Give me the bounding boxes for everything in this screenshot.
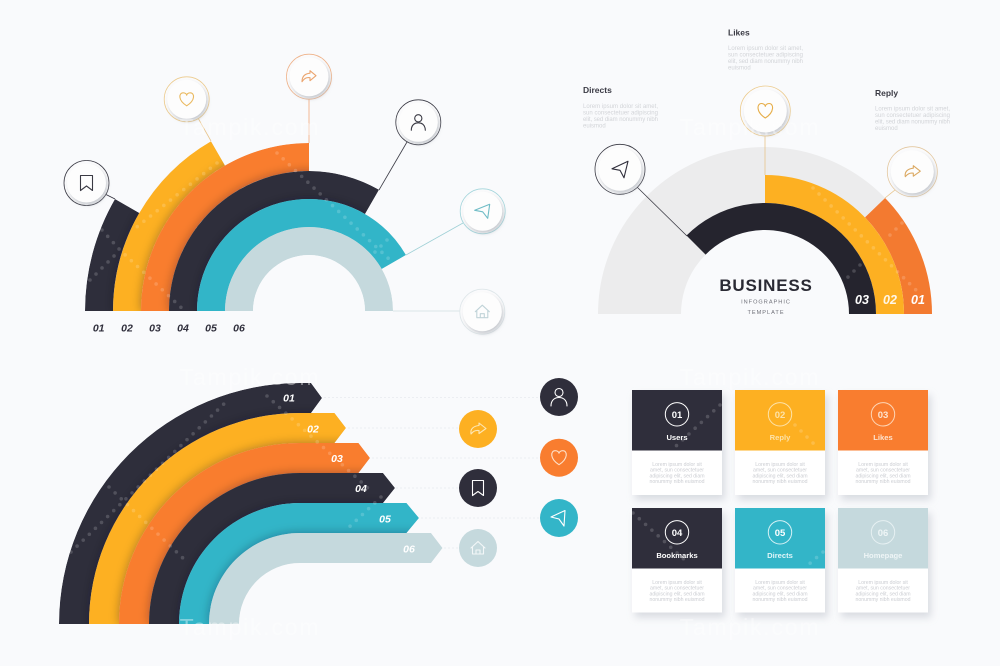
band numbers: 04 — [177, 322, 189, 334]
arrow numbers — [283, 392, 415, 556]
icon: share badge — [286, 54, 332, 99]
watermarks: Tampik.com — [680, 614, 820, 640]
arrow numbers: 05 — [379, 514, 391, 526]
icon: heart badge — [164, 77, 209, 122]
title block: TEMPLATE — [747, 310, 785, 316]
watermarks: Tampik.com — [680, 364, 820, 390]
card: Homepage: Lorem ipsum dolor sit — [858, 580, 908, 586]
card: Homepage: nonummy nibh euismod — [855, 597, 911, 603]
card: Bookmarks: Bookmarks — [656, 551, 698, 560]
text: Reply: elit, sed diam nonummy nibh — [875, 120, 950, 126]
dashed connector lines — [324, 398, 540, 548]
text: Directs: elit, sed diam nonummy nibh — [583, 117, 658, 123]
text: Reply: Lorem ipsum dolor sit amet, — [875, 106, 950, 112]
card: Directs: Lorem ipsum dolor sit — [755, 580, 805, 586]
card: Homepage: amet, sun consectetuer — [856, 586, 910, 592]
card: Reply: adipiscing elit, sed diam — [752, 473, 808, 479]
card: Bookmarks: adipiscing elit, sed diam — [649, 591, 705, 597]
text: Likes: Likes — [728, 28, 750, 38]
connector lines — [105, 99, 463, 311]
text: Reply — [875, 88, 950, 132]
card: Likes: Likes — [873, 433, 893, 442]
dark arc — [686, 203, 876, 314]
card: Bookmarks: nonummy nibh euismod — [649, 597, 705, 603]
band numbers: 05 — [205, 322, 217, 334]
arrow bands — [59, 383, 442, 624]
text: Directs: euismod — [583, 124, 606, 130]
text: Likes: euismod — [728, 66, 751, 72]
arc numbers: 01 — [911, 293, 925, 307]
icon: send badge — [460, 189, 505, 234]
arrow numbers: 06 — [403, 544, 415, 556]
panel: top-left rainbow chart — [64, 54, 505, 334]
card: Homepage — [838, 508, 928, 612]
watermarks — [180, 114, 820, 640]
orange arc — [865, 198, 932, 314]
card: Reply: amet, sun consectetuer — [753, 468, 807, 474]
panel: bottom-left arrow bands — [59, 378, 578, 624]
icon: send disc — [540, 499, 578, 537]
icon: home disc — [459, 529, 497, 567]
text: Likes: sun consectetuer adipiscing — [728, 52, 803, 58]
icon: share badge — [887, 147, 937, 197]
connector lines — [637, 136, 895, 236]
band numbers: 03 — [149, 322, 161, 334]
icon: home badge — [460, 289, 505, 334]
text: Likes: Lorem ipsum dolor sit amet, — [728, 46, 803, 52]
card: Users: adipiscing elit, sed diam — [649, 473, 705, 479]
card: Directs: adipiscing elit, sed diam — [752, 591, 808, 597]
band numbers: 01 — [93, 322, 105, 334]
icon: user disc — [540, 378, 578, 416]
card: Likes: amet, sun consectetuer — [856, 468, 910, 474]
card: Users: nonummy nibh euismod — [649, 479, 705, 485]
card: Likes: nonummy nibh euismod — [855, 479, 911, 485]
icon: bookmark disc — [459, 469, 497, 507]
text: Likes: elit, sed diam nonummy nibh — [728, 59, 803, 65]
watermarks: Tampik.com — [180, 114, 320, 140]
band numbers: 06 — [233, 322, 245, 334]
band numbers: 02 — [121, 322, 133, 334]
band numbers — [93, 322, 245, 334]
card: Users: Lorem ipsum dolor sit — [652, 462, 702, 468]
card: Directs: amet, sun consectetuer — [753, 586, 807, 592]
text: Reply: sun consectetuer adipiscing — [875, 113, 950, 119]
text: Directs — [583, 85, 658, 130]
card: Likes: Lorem ipsum dolor sit — [858, 462, 908, 468]
arc numbers — [855, 293, 925, 307]
card: Reply: Reply — [770, 433, 791, 442]
card: Users — [632, 390, 722, 495]
card: Likes: adipiscing elit, sed diam — [855, 473, 911, 479]
title block: BUSINESS — [719, 276, 813, 295]
icon: bookmark badge — [64, 160, 109, 206]
card: Reply — [735, 390, 825, 495]
card: Reply: 02 — [775, 410, 785, 421]
watermarks: Tampik.com — [180, 614, 320, 640]
card: Bookmarks: Lorem ipsum dolor sit — [652, 580, 702, 586]
rainbow bands — [85, 141, 406, 311]
card: Homepage: adipiscing elit, sed diam — [855, 591, 911, 597]
panel: top-right semicircle chart — [583, 28, 950, 316]
card: Reply: nonummy nibh euismod — [752, 479, 808, 485]
arrow numbers: 01 — [283, 392, 295, 404]
yellow arc — [765, 175, 904, 314]
title block: INFOGRAPHIC — [741, 300, 791, 306]
text: Reply: euismod — [875, 126, 898, 132]
text: Reply: Reply — [875, 88, 898, 98]
card: Homepage: Homepage — [864, 551, 902, 560]
card: Directs: Directs — [767, 551, 793, 560]
card: Bookmarks: 04 — [672, 528, 683, 539]
title block — [719, 276, 813, 316]
arrow numbers: 03 — [331, 453, 343, 465]
card: Directs: 05 — [775, 528, 786, 539]
card: Users: 01 — [672, 410, 683, 421]
text: Directs: Lorem ipsum dolor sit amet, — [583, 104, 658, 110]
panel: cards grid — [632, 390, 928, 612]
card: Directs: nonummy nibh euismod — [752, 597, 808, 603]
card: Bookmarks — [632, 508, 722, 612]
grey arc background — [598, 147, 885, 314]
card: Users: Users — [666, 433, 688, 442]
text: Directs: Directs — [583, 85, 612, 95]
text: Directs: sun consectetuer adipiscing — [583, 110, 658, 116]
card: Likes — [838, 390, 928, 495]
card: Bookmarks: amet, sun consectetuer — [650, 586, 704, 592]
card: Directs — [735, 508, 825, 612]
arrow numbers: 02 — [307, 424, 319, 436]
icon: heart badge — [740, 86, 790, 136]
text: Likes — [728, 28, 803, 72]
icon: send badge — [595, 144, 645, 194]
icon: share disc — [459, 410, 497, 448]
card: Homepage: 06 — [878, 528, 888, 539]
arrow numbers: 04 — [355, 483, 367, 495]
arc numbers: 03 — [855, 293, 869, 307]
icon: heart disc — [540, 439, 578, 477]
watermarks: Tampik.com — [680, 114, 820, 140]
icon: user badge — [396, 100, 441, 145]
arc numbers: 02 — [883, 293, 897, 307]
card: Likes: 03 — [878, 410, 888, 421]
card: Reply: Lorem ipsum dolor sit — [755, 462, 805, 468]
watermarks: Tampik.com — [180, 364, 320, 390]
card: Users: amet, sun consectetuer — [650, 468, 704, 474]
